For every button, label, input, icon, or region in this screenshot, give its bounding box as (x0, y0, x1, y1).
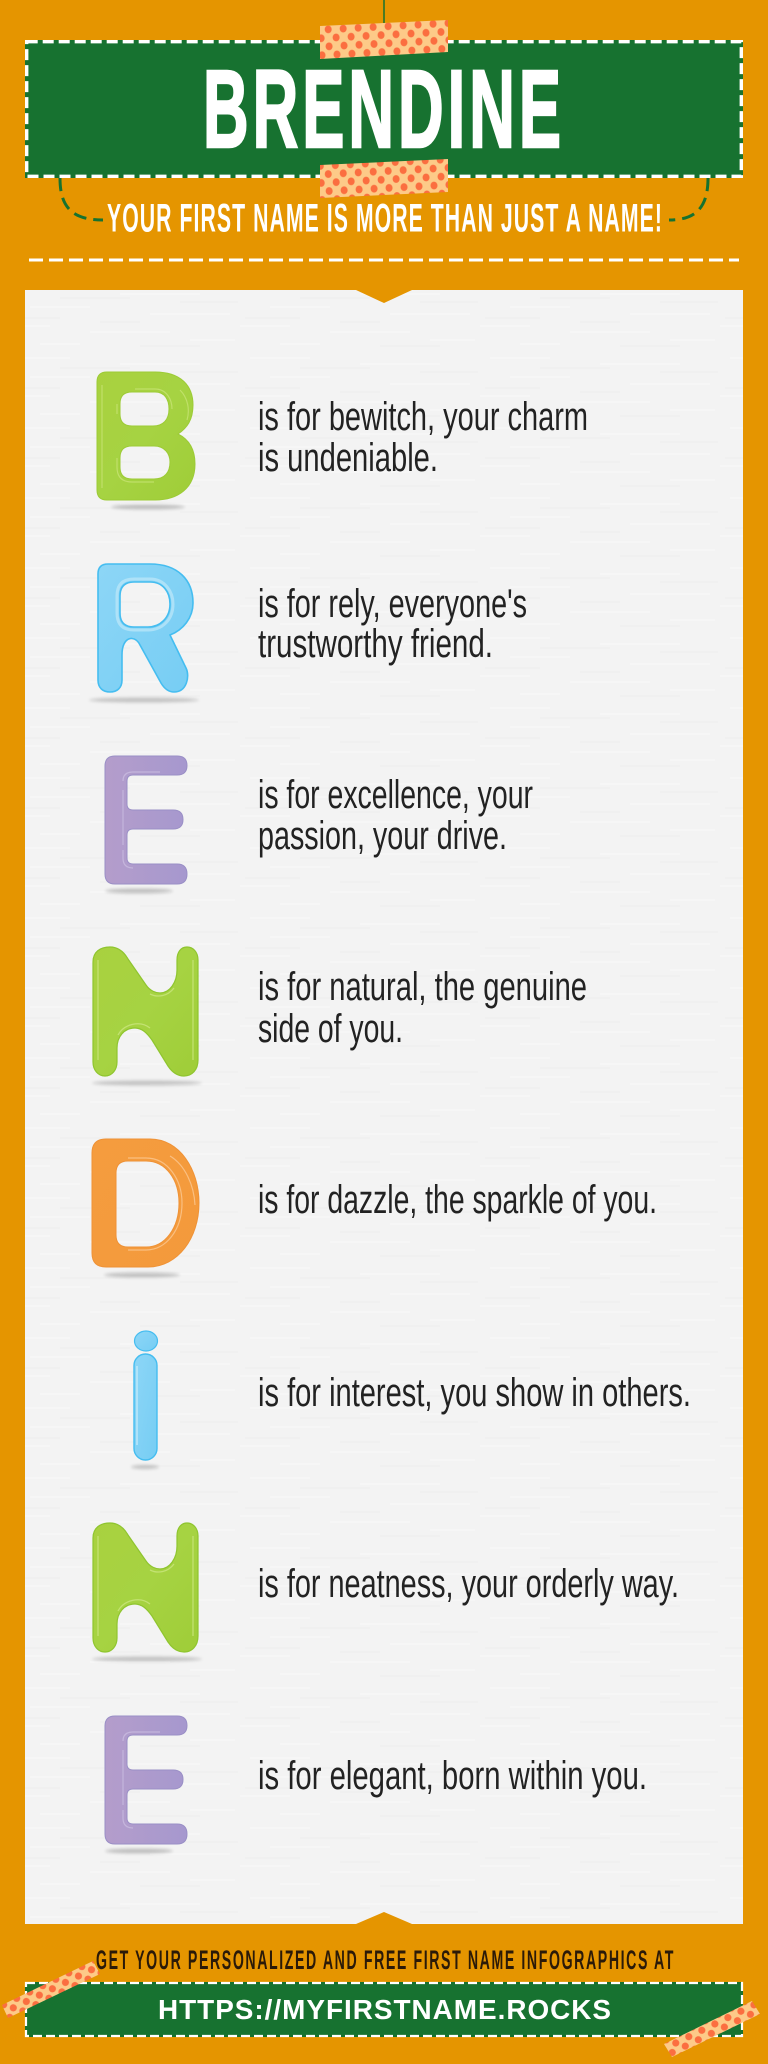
tape: top (320, 20, 448, 59)
row B (97, 372, 588, 509)
row N (92, 947, 587, 1085)
right dashed connector (669, 178, 708, 220)
text: side of you. (258, 1007, 403, 1051)
text: is for natural, the genuine (258, 965, 587, 1009)
tape: footer left (2, 1961, 100, 2018)
left dashed connector (60, 178, 103, 220)
hanging string (383, 0, 385, 24)
tape: footer right (664, 2001, 760, 2057)
panel: letter meanings (25, 290, 743, 1924)
letter i (131, 1331, 159, 1469)
text: is for excellence, your (258, 773, 533, 817)
row I (131, 1331, 691, 1469)
letter E (105, 756, 187, 893)
tape: bottom (320, 159, 448, 198)
text (258, 773, 533, 858)
text: is undeniable. (258, 436, 438, 480)
row E (105, 756, 533, 893)
row N second (92, 1523, 679, 1661)
footer banner (25, 1982, 743, 2037)
letter E second (105, 1716, 187, 1853)
header banner (25, 40, 743, 178)
text (258, 965, 587, 1051)
letter N second (92, 1523, 202, 1661)
text: is for rely, everyone's (258, 582, 527, 626)
letter D (92, 1139, 199, 1277)
text (258, 582, 527, 666)
row E second (105, 1716, 647, 1853)
text: is for bewitch, your charm (258, 395, 588, 439)
letter N (92, 947, 202, 1085)
text (258, 395, 588, 480)
url: HTTPS://MYFIRSTNAME.ROCKS (158, 1994, 612, 2025)
text: passion, your drive. (258, 814, 507, 858)
text: trustworthy friend. (258, 622, 493, 666)
letter B (97, 372, 195, 509)
letter R (89, 564, 199, 702)
row R (89, 564, 527, 702)
row D (92, 1139, 657, 1277)
